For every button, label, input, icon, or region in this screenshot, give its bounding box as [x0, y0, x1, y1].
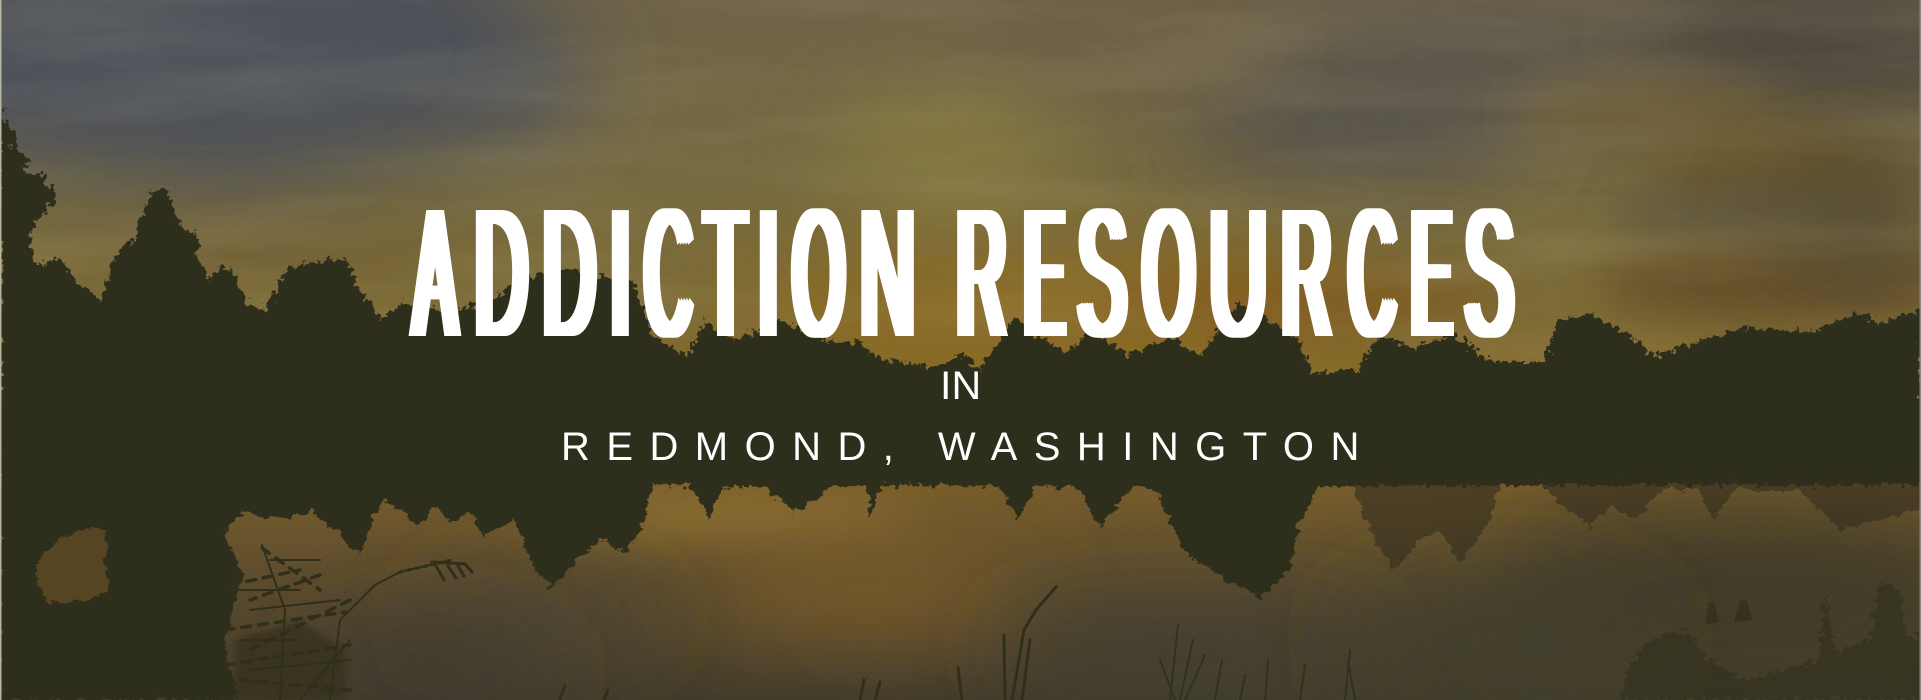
water patch, far left	[36, 528, 107, 602]
water reflections of trees	[0, 460, 1921, 700]
title: T	[705, 170, 746, 375]
tree line silhouette	[0, 105, 1921, 485]
title: S	[1078, 170, 1126, 375]
title: I	[595, 170, 646, 375]
dim bush area, lower left	[235, 620, 345, 700]
sky	[0, 0, 1921, 400]
title: S	[1465, 170, 1513, 375]
fainter reflections, right side	[1350, 478, 1921, 570]
title: E	[1025, 170, 1064, 375]
title: R	[1282, 170, 1331, 375]
title: N	[860, 170, 915, 375]
title: A	[414, 170, 456, 375]
foreground willow plant	[225, 545, 472, 700]
title: C	[1349, 170, 1396, 375]
reeds and grasses	[560, 587, 1355, 700]
title: O	[1143, 170, 1194, 375]
subtitle: location: REDMOND, WASHINGTON	[561, 425, 1376, 469]
title: E	[1412, 170, 1451, 375]
title: C	[645, 170, 692, 375]
title: D	[543, 170, 596, 375]
lake water	[0, 470, 1921, 700]
title: O	[793, 170, 845, 375]
right bank and ducks	[1620, 580, 1921, 700]
title: U	[1209, 170, 1268, 375]
title: I	[743, 170, 794, 375]
title: D	[475, 170, 527, 375]
subtitle: in: IN	[940, 364, 981, 408]
title: R	[957, 170, 1006, 375]
